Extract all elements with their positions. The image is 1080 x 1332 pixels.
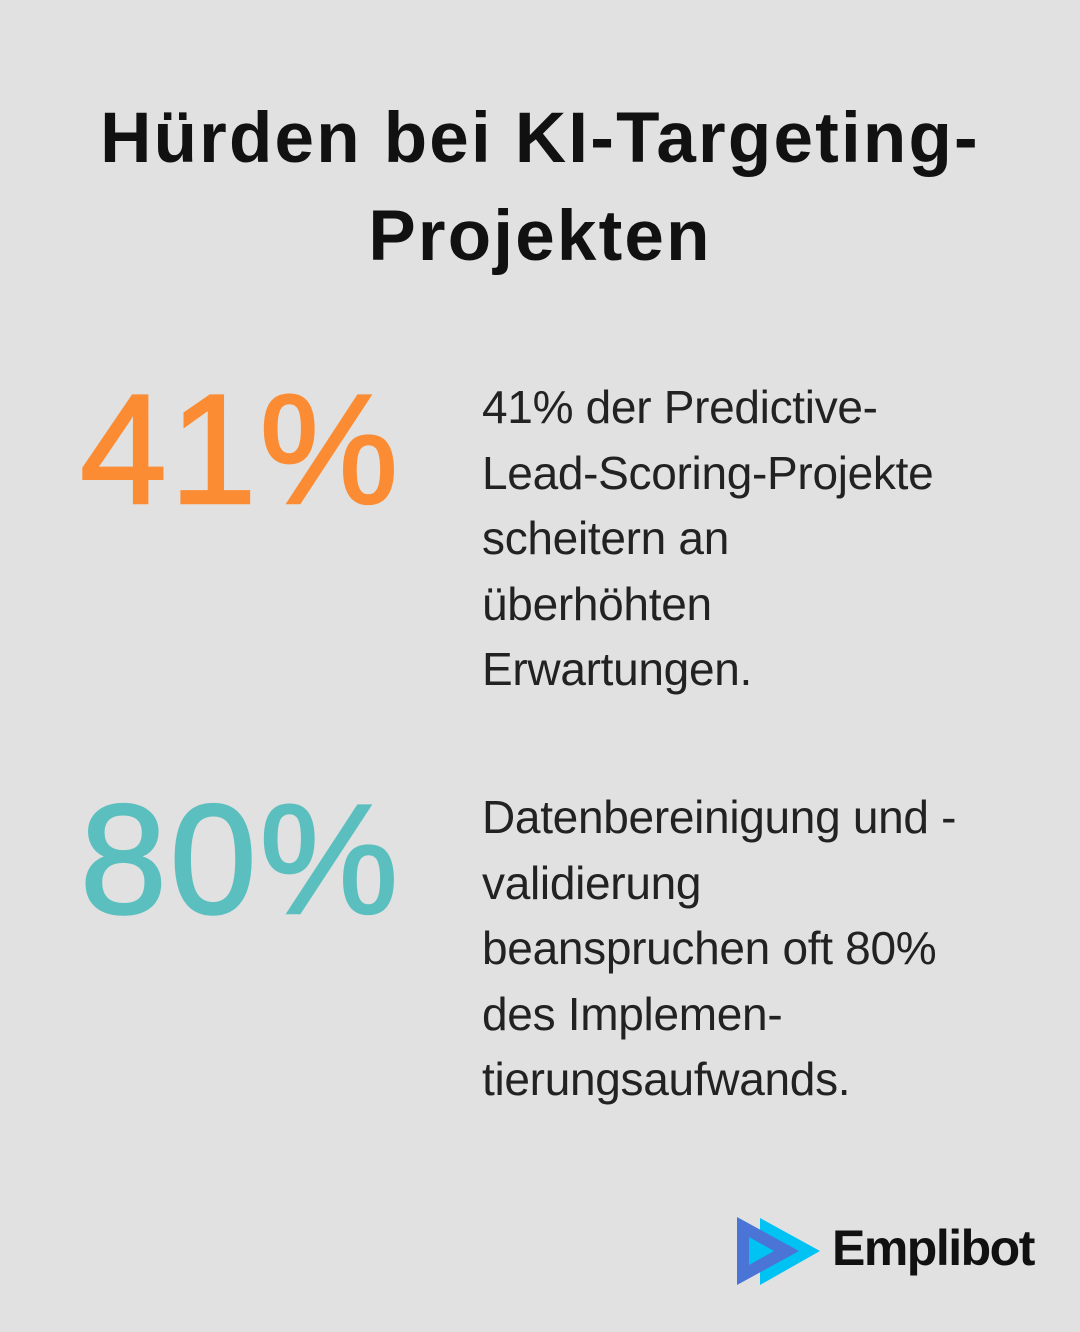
text: 41% description: scheitern an — [482, 512, 729, 564]
logo text: Emplibot — [832, 1220, 1034, 1276]
logo — [737, 1217, 1035, 1285]
title — [100, 99, 980, 276]
text: 41% description: 41% der Predictive- — [482, 381, 878, 433]
text: 41% description: Erwartungen. — [482, 643, 752, 695]
stat: 41%: 41% — [80, 363, 401, 537]
text: 41% description: überhöhten — [482, 578, 712, 630]
stat: 80%: 80% — [80, 773, 401, 947]
icon: play triangles — [737, 1217, 820, 1285]
title: Hürden bei KI-Targeting- — [100, 99, 980, 178]
text: 80% description — [482, 791, 956, 1105]
text: 41% description — [482, 381, 933, 695]
text: 80% description: des Implemen- — [482, 988, 782, 1040]
text: 80% description: validierung — [482, 856, 701, 908]
title: Projekten — [368, 197, 712, 276]
text: 80% description: Datenbereinigung und - — [482, 791, 956, 843]
text: 80% description: beanspruchen oft 80% — [482, 922, 936, 974]
text: 41% description: Lead-Scoring-Projekte — [482, 446, 933, 498]
text: 80% description: tierungsaufwands. — [482, 1053, 850, 1105]
